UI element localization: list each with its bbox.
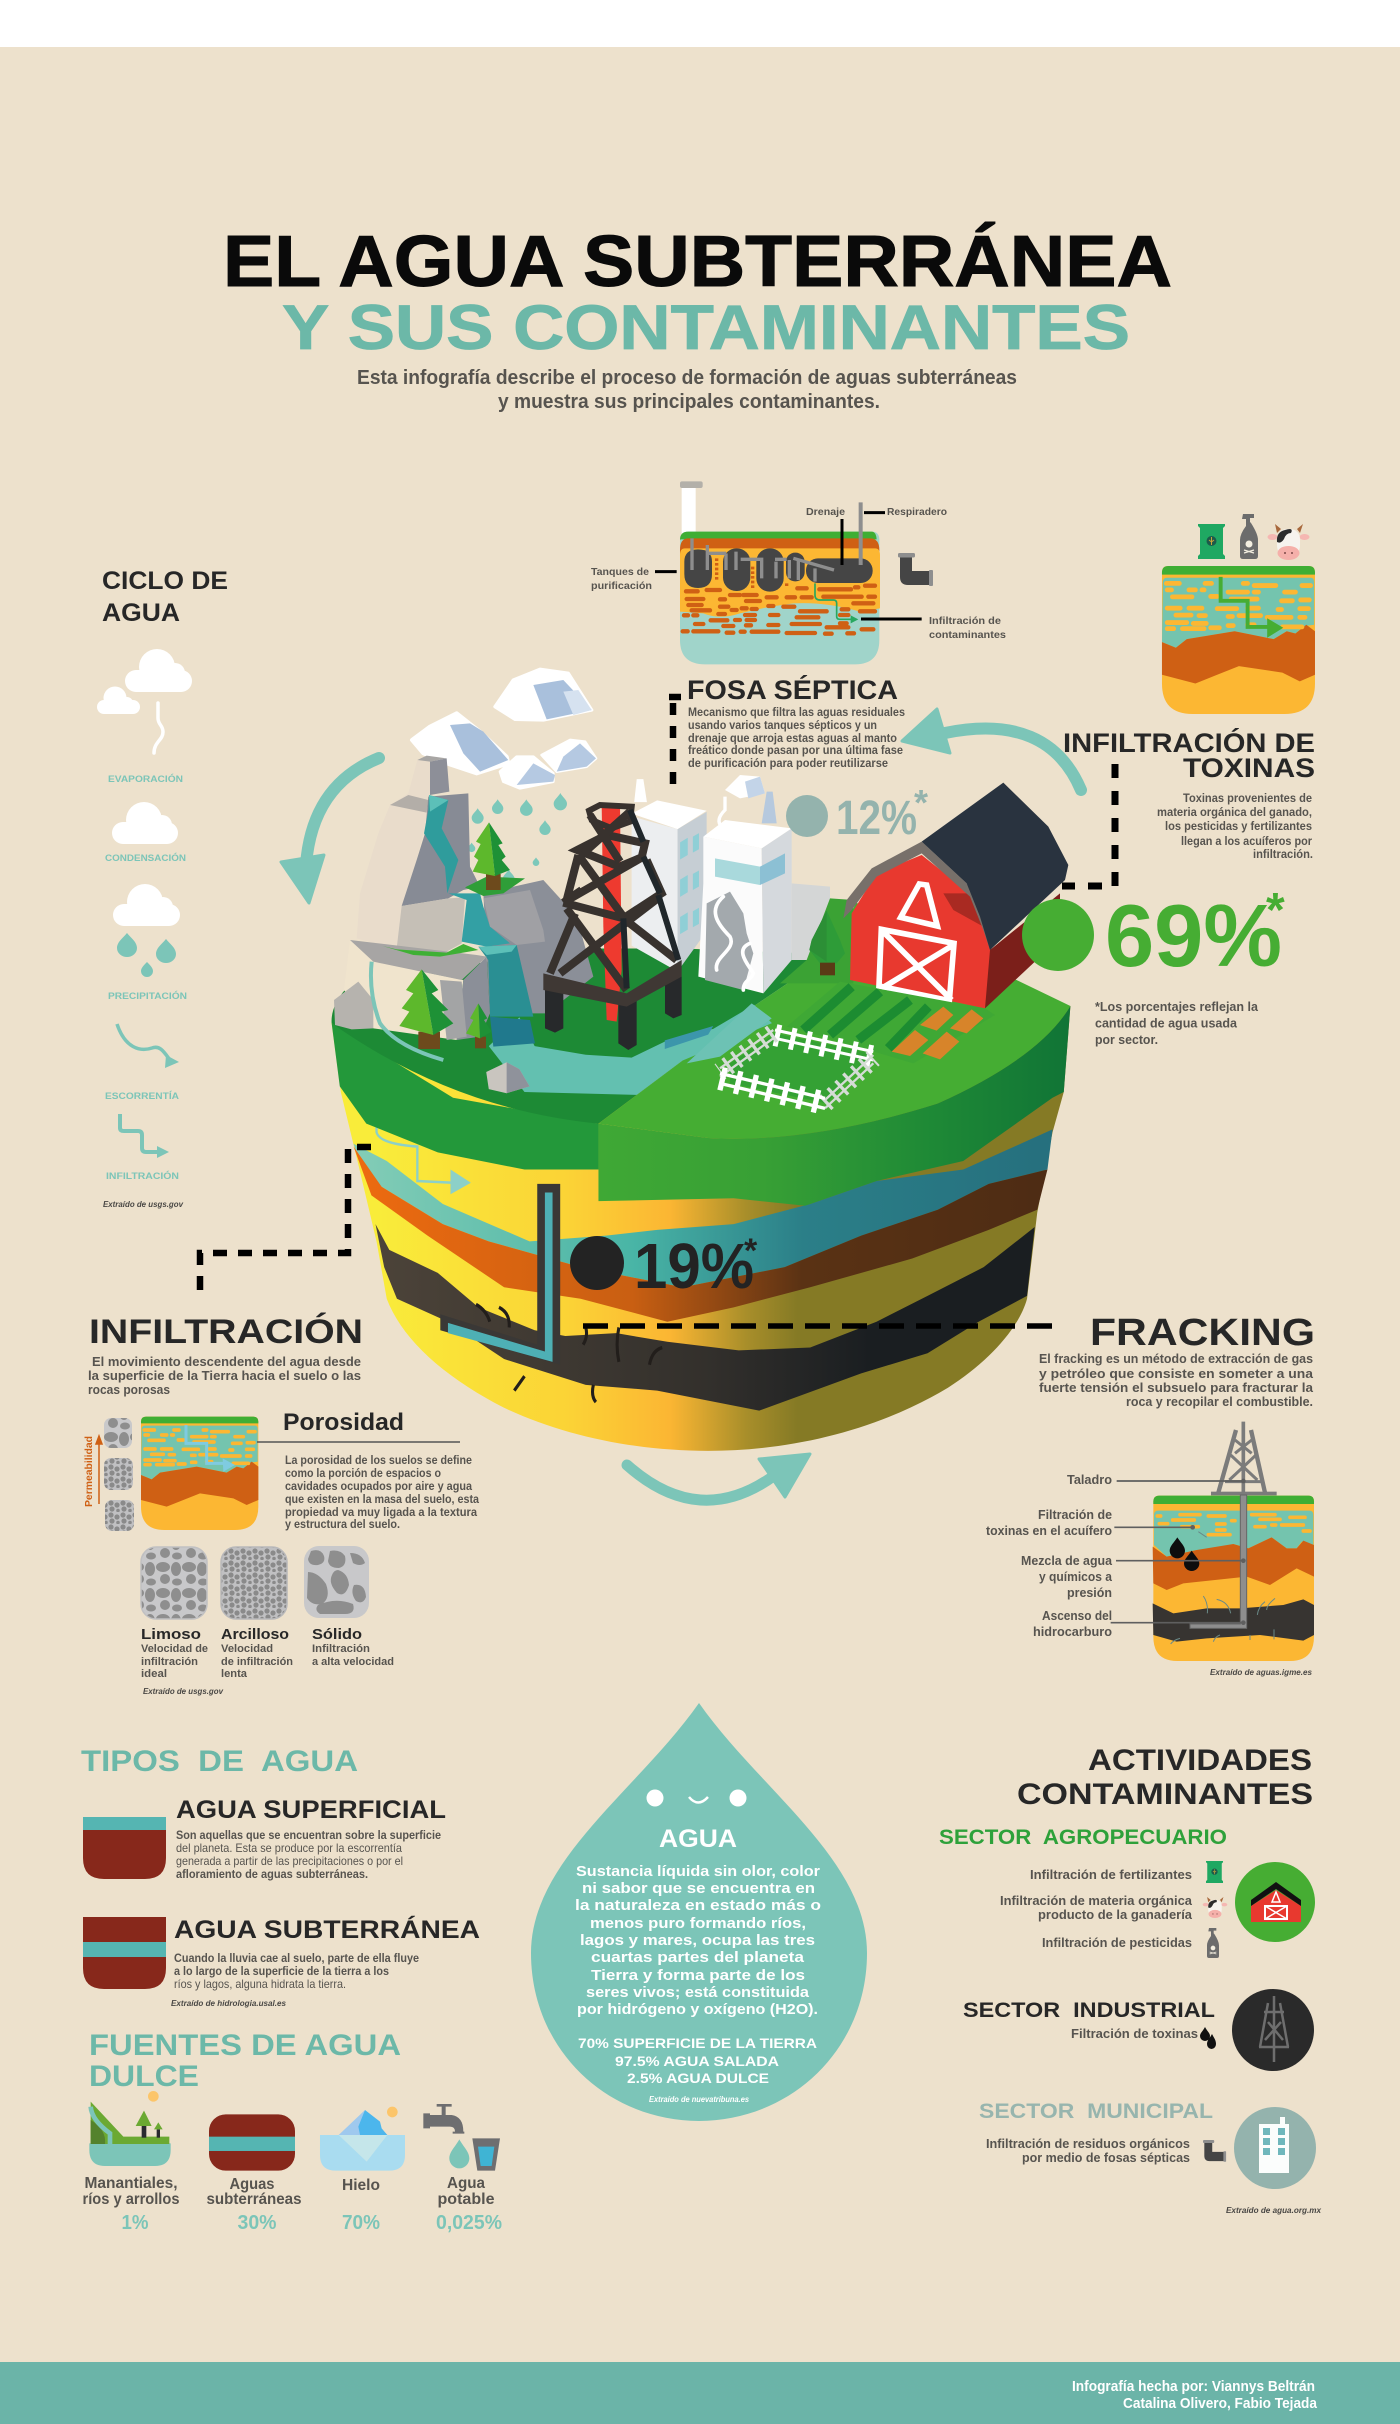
source: Extraído de usgs.gov bbox=[103, 1199, 184, 1209]
heading: fracking: FRACKING bbox=[1090, 1312, 1315, 1354]
icon: bottle bbox=[1207, 1928, 1219, 1958]
heading: porosidad: Porosidad bbox=[283, 1409, 404, 1436]
label: tanques: purificación bbox=[591, 580, 652, 592]
dashed connector: fosa bbox=[669, 697, 682, 785]
fracking labels: Filtración de bbox=[1038, 1508, 1112, 1522]
labels: manantiales: Manantiales, bbox=[84, 2175, 178, 2192]
icon: evaporation clouds bbox=[97, 649, 192, 753]
labels: agua potable: 0,025% bbox=[436, 2212, 502, 2234]
dashed connector: infiltracion bbox=[200, 1147, 371, 1301]
text: toxinas: los pesticidas y fertilizantes bbox=[1165, 821, 1312, 833]
labels: hielo: 70% bbox=[342, 2212, 380, 2234]
text: municipal: por medio de fosas sépticas bbox=[1022, 2151, 1190, 2165]
text: fosa septica: freático donde pasan por una última fase bbox=[688, 743, 903, 757]
text: infiltracion: la superficie de la Tierra hacia el suelo o las bbox=[88, 1368, 361, 1383]
text: toxinas: llegan a los acuíferos por bbox=[1181, 836, 1312, 848]
icon: infiltration arrow bbox=[120, 1114, 169, 1158]
oil derrick bbox=[543, 803, 682, 1050]
text: agua superficial: del planeta. Esta se produce por la escorrentía bbox=[176, 1841, 402, 1855]
text: porosidad bbox=[285, 1453, 479, 1531]
heading: fuentes: DULCE bbox=[89, 2060, 199, 2093]
fracking labels: y químicos a bbox=[1039, 1570, 1113, 1584]
soil type: limoso: infiltración bbox=[141, 1656, 198, 1668]
icon: agua potable bbox=[423, 2104, 500, 2171]
labels: agua potable: Agua bbox=[447, 2175, 485, 2192]
panel: fuentes de agua dulce bbox=[82, 2029, 502, 2234]
subtitle: y muestra sus principales contaminantes. bbox=[498, 391, 880, 413]
arrow: left bbox=[281, 758, 379, 903]
heading: municipal: SECTOR MUNICIPAL bbox=[979, 2100, 1213, 2123]
text: definition: cuartas partes del planeta bbox=[591, 1949, 805, 1966]
text: municipal bbox=[986, 2137, 1190, 2165]
text: fracking: fuerte tensión el subsuelo para fracturar la bbox=[1039, 1380, 1314, 1395]
rain drops bbox=[468, 793, 567, 885]
text: agua superficial: afloramiento de aguas subterráneas. bbox=[176, 1867, 368, 1881]
footer band bbox=[0, 2362, 1400, 2424]
heading: tipos de agua: TIPOS DE AGUA bbox=[81, 1745, 358, 1778]
labels: hielo bbox=[342, 2177, 380, 2234]
dashed connector: fracking bbox=[583, 1323, 1053, 1329]
text: toxinas: infiltración. bbox=[1253, 849, 1313, 861]
soil type: limoso: Velocidad de bbox=[141, 1643, 208, 1655]
labels: manantiales: 1% bbox=[122, 2212, 149, 2234]
icon: hielo bbox=[320, 2107, 405, 2171]
small rock bbox=[486, 1062, 530, 1093]
text: fosa septica: usando varios tanques sépticos y un bbox=[688, 718, 877, 732]
text: agua superficial bbox=[176, 1828, 441, 1881]
heading: infiltracion: INFILTRACIÓN bbox=[89, 1313, 363, 1351]
text: agua subterranea: Cuando la lluvia cae al suelo, parte de ella fluye bbox=[174, 1951, 419, 1965]
text: agua subterranea bbox=[174, 1951, 419, 1991]
heading: infiltracion de toxinas: INFILTRACIÓN DE bbox=[1063, 727, 1315, 758]
sector: agropecuario bbox=[939, 1826, 1315, 1958]
stat: 12%: 12% bbox=[836, 792, 917, 845]
panel: toxinas diagram bbox=[1162, 514, 1315, 714]
stat: 69%: * bbox=[1266, 884, 1285, 937]
stat: 19%: * bbox=[744, 1232, 758, 1270]
labels: agua potable: potable bbox=[438, 2191, 495, 2208]
text: fosa septica: de purificación para poder reutilizarse bbox=[688, 756, 888, 770]
text: infiltracion: El movimiento descendente del agua desde bbox=[92, 1354, 361, 1369]
heading: actividades: CONTAMINANTES bbox=[1017, 1778, 1313, 1811]
sector: municipal bbox=[979, 2100, 1316, 2189]
subtitle bbox=[357, 367, 1017, 413]
icon: aguas subterraneas bbox=[209, 2114, 295, 2171]
text: agua superficial: generada a partir de las precipitaciones o por el bbox=[176, 1854, 403, 1868]
dashed connector: toxinas bbox=[1062, 764, 1115, 886]
soil type: arcilloso: lenta bbox=[221, 1668, 248, 1680]
text: infiltracion: rocas porosas bbox=[88, 1382, 170, 1397]
credits: Catalina Olivero, Fabio Tejada bbox=[1123, 2395, 1318, 2412]
labels: aguas subterraneas: subterráneas bbox=[206, 2191, 302, 2208]
septic diagram bbox=[655, 481, 922, 664]
heading: agropecuario: SECTOR AGROPECUARIO bbox=[939, 1826, 1227, 1849]
soil type: arcilloso: Velocidad bbox=[221, 1643, 273, 1655]
arrow: bottom bbox=[627, 1454, 810, 1500]
soil type: limoso: ideal bbox=[141, 1668, 167, 1680]
heading: agua superficial: AGUA SUPERFICIAL bbox=[176, 1796, 446, 1824]
icon: cow bbox=[1203, 1897, 1227, 1918]
text: porosidad: que existen en la masa del suelo, esta bbox=[285, 1492, 479, 1506]
heading: agua subterranea: AGUA SUBTERRÁNEA bbox=[174, 1915, 480, 1944]
heading: fuentes bbox=[89, 2029, 401, 2093]
label: precipitacion: PRECIPITACIÓN bbox=[108, 990, 187, 1002]
icon: superficial bbox=[83, 1817, 166, 1879]
heading: industrial: SECTOR INDUSTRIAL bbox=[963, 1999, 1215, 2022]
text: drop stats: 70% SUPERFICIE DE LA TIERRA bbox=[578, 2035, 817, 2051]
fracking labels: Mezcla de agua bbox=[1021, 1554, 1113, 1568]
text: fracking bbox=[1039, 1351, 1314, 1409]
text: fracking: El fracking es un método de extracción de gas bbox=[1039, 1351, 1313, 1366]
arrow: top right bbox=[902, 709, 1081, 790]
text: drop stats bbox=[578, 2035, 817, 2086]
labels: manantiales bbox=[82, 2175, 180, 2234]
footnote: por sector. bbox=[1095, 1032, 1158, 1047]
text: municipal: Infiltración de residuos orgánicos bbox=[986, 2137, 1190, 2151]
text: drop stats: 97.5% AGUA SALADA bbox=[615, 2053, 779, 2069]
soil diagram bbox=[1162, 566, 1315, 714]
labels: manantiales: ríos y arrollos bbox=[82, 2191, 180, 2208]
text: fracking: roca y recopilar el combustible. bbox=[1126, 1394, 1313, 1409]
mountains, clouds, derrick bbox=[334, 669, 682, 1060]
icon: building circle bbox=[1234, 2107, 1316, 2189]
text: definition: Tierra y forma parte de los bbox=[591, 1967, 805, 1984]
text: fosa septica: drenaje que arroja estas aguas al manto bbox=[688, 731, 897, 745]
text: toxinas bbox=[1157, 793, 1313, 861]
stat: 69% bbox=[1022, 884, 1285, 985]
list: agropecuario: producto de la ganadería bbox=[1038, 1908, 1193, 1922]
text: definition: ni sabor que se encuentra en bbox=[582, 1880, 815, 1897]
credits: Infografía hecha por: Viannys Beltrán bbox=[1072, 2378, 1315, 2395]
arrow: permeabilidad bbox=[96, 1436, 102, 1504]
text: agua superficial: Son aquellas que se encuentran sobre la superficie bbox=[176, 1828, 441, 1842]
panel: ciclo de agua bbox=[97, 567, 228, 1209]
source: Extraído de aguas.igme.es bbox=[1210, 1667, 1312, 1677]
label: permeabilidad: Permeabilidad bbox=[83, 1436, 95, 1507]
grass top bbox=[332, 903, 1070, 1206]
icon: manantiales bbox=[89, 2091, 171, 2166]
icon: pesticide bottle bbox=[1240, 514, 1258, 559]
list: agropecuario: Infiltración de materia orgánica bbox=[1000, 1894, 1193, 1908]
heading: actividades bbox=[1017, 1744, 1313, 1811]
text: porosidad: propiedad va muy ligada a la textura bbox=[285, 1505, 477, 1519]
label: infiltracion de contaminantes: contaminantes bbox=[929, 629, 1006, 641]
label: condensacion: CONDENSACIÓN bbox=[105, 852, 186, 864]
label: escorrentia: ESCORRENTÍA bbox=[105, 1091, 179, 1102]
fracking labels: Ascenso del bbox=[1042, 1609, 1112, 1623]
icon: septic pipe bbox=[898, 553, 933, 586]
heading: actividades: ACTIVIDADES bbox=[1088, 1744, 1312, 1777]
text: toxinas: materia orgánica del ganado, bbox=[1157, 807, 1312, 819]
text: definition: por hidrógeno y oxígeno (H2O). bbox=[577, 2001, 818, 2018]
text: drop stats: 2.5% AGUA DULCE bbox=[627, 2070, 769, 2086]
list: agropecuario: Infiltración de pesticidas bbox=[1042, 1936, 1192, 1950]
icon: precipitation bbox=[113, 884, 180, 977]
credits bbox=[1072, 2378, 1318, 2412]
text: definition: la naturaleza en estado más o bbox=[575, 1897, 821, 1914]
text: agua subterranea: ríos y lagos, alguna hidrata la tierra. bbox=[174, 1977, 346, 1991]
source: Extraído de hidrologia.usal.es bbox=[171, 1998, 286, 2008]
soil type: arcilloso: de infiltración bbox=[221, 1656, 293, 1668]
heading: fosa septica: FOSA SÉPTICA bbox=[687, 674, 898, 705]
building: right, tree and barn bbox=[687, 775, 1068, 1108]
title: Y SUS CONTAMINANTES bbox=[282, 293, 1130, 363]
source: Extraído de usgs.gov bbox=[143, 1686, 224, 1696]
text: definition: menos puro formando ríos, bbox=[590, 1915, 806, 1932]
text: toxinas: Toxinas provenientes de bbox=[1183, 793, 1312, 805]
list: agropecuario: Infiltración de fertilizantes bbox=[1030, 1868, 1192, 1882]
small soil swatches bbox=[104, 1418, 134, 1531]
soil type: solido: Sólido bbox=[312, 1626, 362, 1643]
label: drenaje: Drenaje bbox=[806, 506, 845, 518]
footnote: *Los porcentajes reflejan la bbox=[1095, 999, 1259, 1014]
labels: aguas subterraneas: Aguas bbox=[230, 2176, 275, 2193]
stat: 12%: * bbox=[914, 782, 928, 823]
sector: industrial bbox=[963, 1989, 1314, 2071]
text: definition bbox=[575, 1863, 821, 2018]
icon: pipe bbox=[1203, 2140, 1226, 2162]
stat: 12% bbox=[786, 782, 928, 845]
label: evaporacion: EVAPORACIÓN bbox=[108, 773, 183, 785]
soil type: solido: Infiltración bbox=[312, 1643, 370, 1655]
drop face bbox=[646, 1790, 746, 1806]
panel: water drop bbox=[531, 1703, 867, 2121]
heading: agua: AGUA bbox=[659, 1825, 737, 1853]
text: fosa septica: Mecanismo que filtra las aguas residuales bbox=[688, 705, 905, 719]
list: agropecuario bbox=[1000, 1868, 1193, 1950]
icon: runoff arrow bbox=[117, 1024, 179, 1068]
icon: bag bbox=[1206, 1861, 1223, 1883]
fracking labels bbox=[986, 1473, 1113, 1639]
footnote bbox=[1095, 999, 1259, 1047]
fracking labels: presión bbox=[1067, 1586, 1112, 1600]
heading: ciclo de agua bbox=[102, 567, 228, 627]
text: porosidad: La porosidad de los suelos se define bbox=[285, 1453, 472, 1467]
icon: derrick circle bbox=[1232, 1989, 1314, 2071]
soil type: solido: a alta velocidad bbox=[312, 1656, 394, 1668]
drop shape bbox=[531, 1703, 867, 2121]
trees bbox=[399, 822, 510, 1049]
soil type: limoso: Limoso bbox=[141, 1626, 201, 1643]
title bbox=[223, 222, 1172, 363]
building: left bbox=[632, 779, 707, 971]
labels: hielo: Hielo bbox=[342, 2177, 380, 2194]
fracking diagram bbox=[1111, 1422, 1314, 1661]
labels: aguas subterraneas bbox=[206, 2176, 302, 2234]
heading: infiltracion de toxinas bbox=[1063, 727, 1315, 783]
footnote: cantidad de agua usada bbox=[1095, 1016, 1238, 1030]
label: tanques: Tanques de bbox=[591, 566, 649, 578]
panel: tipos de agua bbox=[81, 1745, 480, 2008]
icon: subterranea bbox=[83, 1917, 166, 1989]
label: tanques bbox=[591, 566, 652, 592]
text: fracking: y petróleo que consiste en someter a una bbox=[1039, 1366, 1314, 1381]
text: fosa septica bbox=[688, 705, 905, 770]
soil diagram bbox=[141, 1417, 258, 1530]
text: agua subterranea: a lo largo de la superficie de la tierra a los bbox=[174, 1964, 389, 1978]
label: infiltracion: INFILTRACIÓN bbox=[106, 1170, 179, 1182]
text: definition: seres vivos; está constituida bbox=[586, 1984, 810, 2001]
panel: actividades contaminantes bbox=[939, 1744, 1322, 2215]
stat: 69%: 69% bbox=[1105, 886, 1282, 985]
labels: aguas subterraneas: 30% bbox=[238, 2212, 277, 2234]
text: industrial: Filtración de toxinas bbox=[1071, 2027, 1198, 2041]
mountain bbox=[334, 756, 593, 1060]
text: definition: lagos y mares, ocupa las tres bbox=[580, 1932, 815, 1949]
icon: barn circle bbox=[1235, 1862, 1315, 1942]
fracking labels: Taladro bbox=[1067, 1473, 1112, 1487]
stat: 19% bbox=[570, 1230, 758, 1302]
icon: condensation cloud bbox=[112, 802, 178, 844]
labels: agua potable bbox=[436, 2175, 502, 2234]
soil type: arcilloso bbox=[221, 1547, 293, 1680]
text: porosidad: como la porción de espacios o bbox=[285, 1466, 441, 1480]
soil type: arcilloso: Arcilloso bbox=[221, 1626, 289, 1643]
label: respiradero: Respiradero bbox=[887, 506, 947, 518]
title: EL AGUA SUBTERRÁNEA bbox=[223, 222, 1172, 302]
icon: fertilizer bag bbox=[1198, 524, 1225, 559]
stat: 19%: 19% bbox=[634, 1230, 754, 1302]
icon: toxic drops bbox=[1200, 2027, 1216, 2049]
fracking labels: toxinas en el acuífero bbox=[986, 1524, 1112, 1538]
text: infiltracion bbox=[88, 1354, 361, 1397]
label: infiltracion de contaminantes: Infiltración de bbox=[929, 615, 1001, 627]
text: definition: Sustancia líquida sin olor, color bbox=[576, 1863, 820, 1880]
heading: fuentes: FUENTES DE AGUA bbox=[89, 2029, 401, 2062]
panel: fosa septica diagram bbox=[591, 481, 1006, 664]
illustration: earth cylinder bbox=[332, 669, 1070, 1451]
fracking labels: hidrocarburo bbox=[1033, 1625, 1112, 1639]
clouds bbox=[412, 669, 596, 788]
soil type: solido bbox=[304, 1546, 394, 1668]
panel: porosidad bbox=[83, 1409, 479, 1696]
heading: ciclo de agua: CICLO DE bbox=[102, 567, 228, 595]
heading: ciclo de agua: AGUA bbox=[102, 599, 180, 627]
text: porosidad: y estructura del suelo. bbox=[285, 1517, 400, 1531]
soil type: limoso bbox=[141, 1547, 208, 1680]
subtitle: Esta infografía describe el proceso de formación de aguas subterráneas bbox=[357, 367, 1017, 389]
text: porosidad: cavidades ocupados por aire y agua bbox=[285, 1479, 472, 1493]
source: Extraído de nuevatribuna.es bbox=[649, 2094, 749, 2104]
heading: infiltracion de toxinas: TOXINAS bbox=[1183, 753, 1315, 783]
icon: cow bbox=[1268, 524, 1310, 560]
label: infiltracion de contaminantes bbox=[929, 615, 1006, 641]
source: Extraído de agua.org.mx bbox=[1226, 2205, 1322, 2215]
soil layers bbox=[332, 1006, 1070, 1451]
